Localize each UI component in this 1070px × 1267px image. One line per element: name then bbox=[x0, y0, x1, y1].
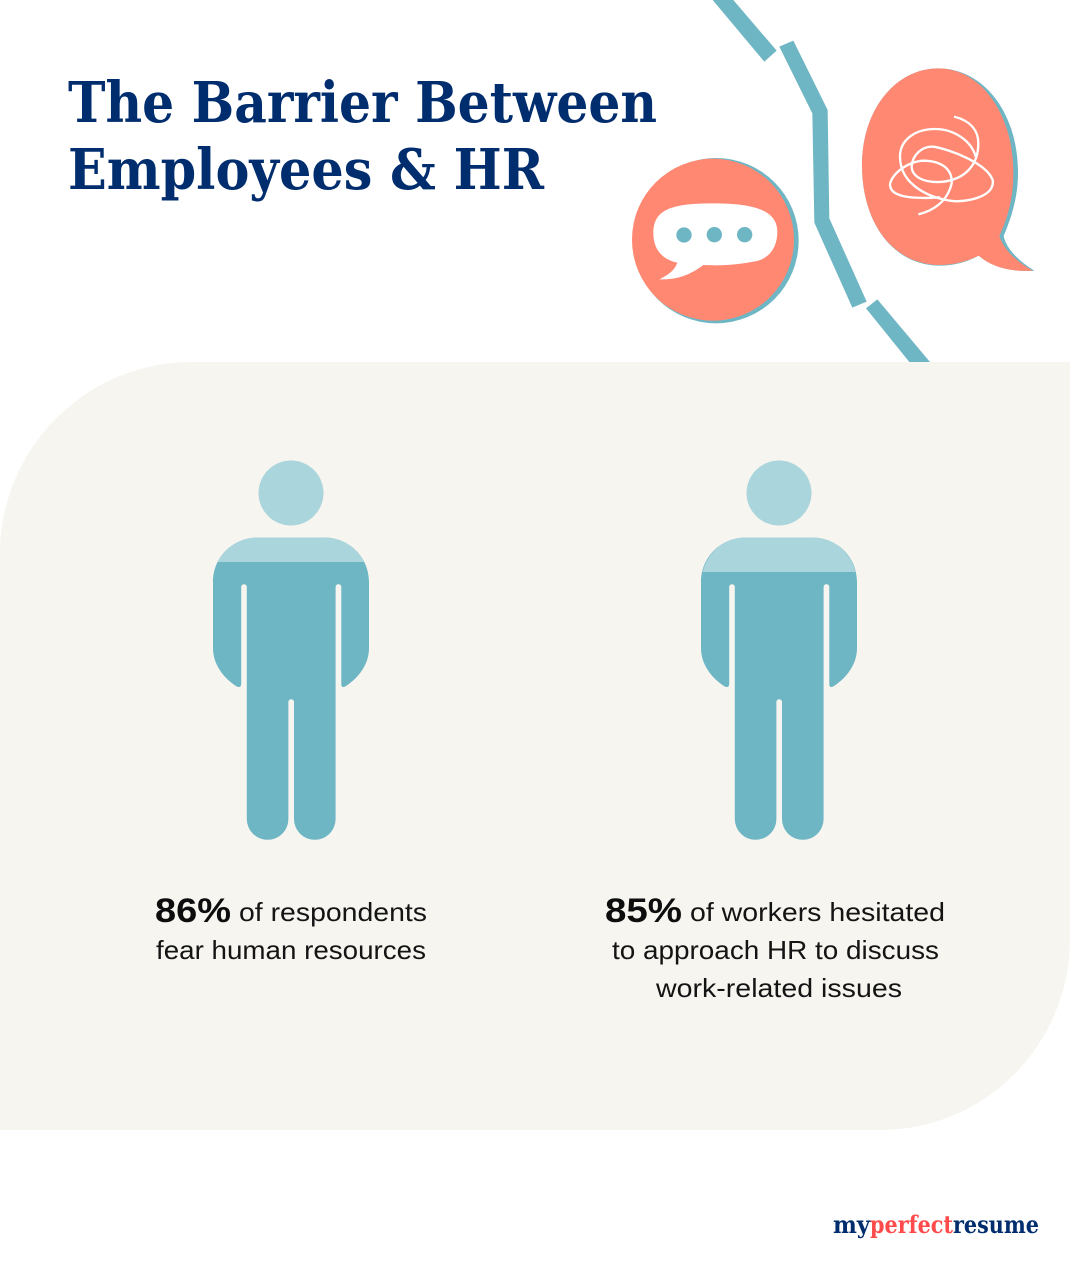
logo: myperfectresume: my bbox=[833, 1210, 871, 1239]
text: 85% statistic: 85% bbox=[605, 892, 682, 930]
text: 85% statistic: to approach HR to discuss bbox=[612, 935, 939, 965]
text: 85% statistic: work-related issues bbox=[655, 973, 902, 1003]
text: 85% statistic: of workers hesitated bbox=[690, 897, 945, 927]
body unfilled portion bbox=[218, 538, 364, 562]
title bbox=[68, 70, 657, 203]
title: The Barrier Between bbox=[68, 70, 657, 136]
text: 85% statistic bbox=[605, 892, 945, 1003]
figure: 85% person icon bbox=[701, 460, 857, 840]
body fill bbox=[701, 538, 857, 840]
head bbox=[746, 460, 812, 526]
body unfilled portion bbox=[702, 538, 856, 572]
text: 86% statistic: of respondents bbox=[239, 897, 427, 927]
text: 86% statistic: fear human resources bbox=[156, 935, 426, 965]
logo: myperfectresume: perfect bbox=[870, 1210, 953, 1239]
logo: myperfectresume: resume bbox=[953, 1210, 1039, 1239]
head bbox=[258, 460, 324, 526]
figure: 86% person icon bbox=[213, 460, 369, 840]
text: 86% statistic: 86% bbox=[155, 892, 231, 930]
logo: myperfectresume bbox=[833, 1210, 1039, 1239]
panel: beige background bbox=[0, 362, 1070, 1130]
icon: round chat bubble bbox=[632, 158, 799, 323]
barrier: broken teal line bbox=[713, 0, 930, 362]
text: 86% statistic bbox=[155, 892, 427, 965]
title: Employees & HR bbox=[68, 137, 544, 203]
icon: speech bubble with scribble bbox=[862, 68, 1034, 271]
body fill bbox=[213, 538, 369, 840]
